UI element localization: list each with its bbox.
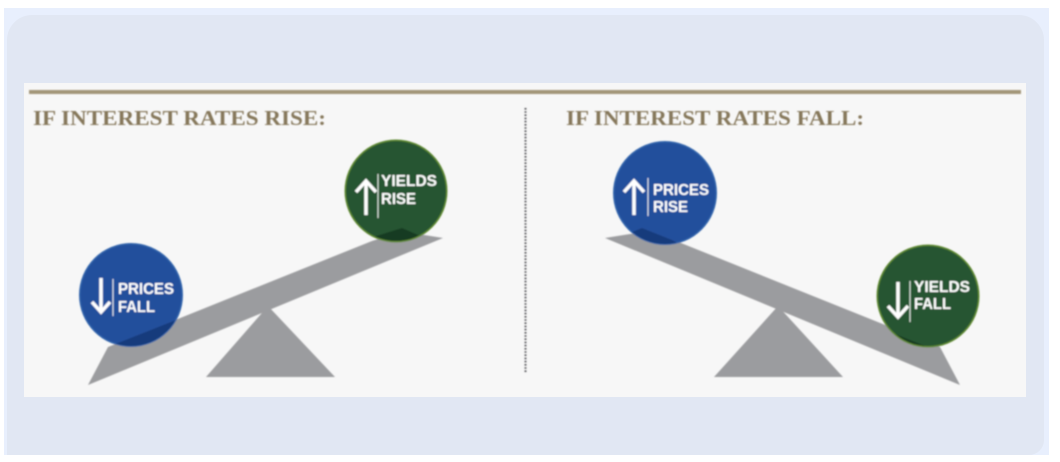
- arrow up: [624, 181, 644, 215]
- arrow up: [356, 181, 376, 215]
- ball: yields fall: [876, 244, 980, 360]
- top rule: [29, 90, 1021, 94]
- beam: [88, 232, 443, 385]
- beam: [605, 232, 960, 385]
- ball: prices fall: [78, 242, 184, 348]
- label: PRICES: [118, 281, 174, 298]
- arrow down: [888, 282, 908, 317]
- white chart panel: [24, 83, 1026, 397]
- fulcrum: [206, 306, 335, 377]
- arrow down: [92, 278, 110, 312]
- seesaw: rates rise: [88, 232, 443, 385]
- label: YIELDS: [381, 173, 437, 190]
- heading: rates fall: IF INTEREST RATES FALL:: [566, 106, 864, 130]
- label: YIELDS: [914, 279, 970, 296]
- label: RISE: [653, 199, 688, 216]
- seesaw: rates fall: [605, 232, 960, 385]
- label: PRICES: [653, 182, 709, 199]
- fulcrum: [714, 306, 843, 377]
- label: RISE: [381, 191, 416, 208]
- ball: prices rise: [613, 141, 717, 250]
- ball: yields rise: [344, 140, 448, 250]
- heading: rates rise: IF INTEREST RATES RISE:: [33, 106, 326, 130]
- label: FALL: [914, 296, 951, 313]
- dotted divider: [524, 108, 526, 372]
- label: FALL: [118, 299, 155, 316]
- chart artwork: [29, 90, 1021, 385]
